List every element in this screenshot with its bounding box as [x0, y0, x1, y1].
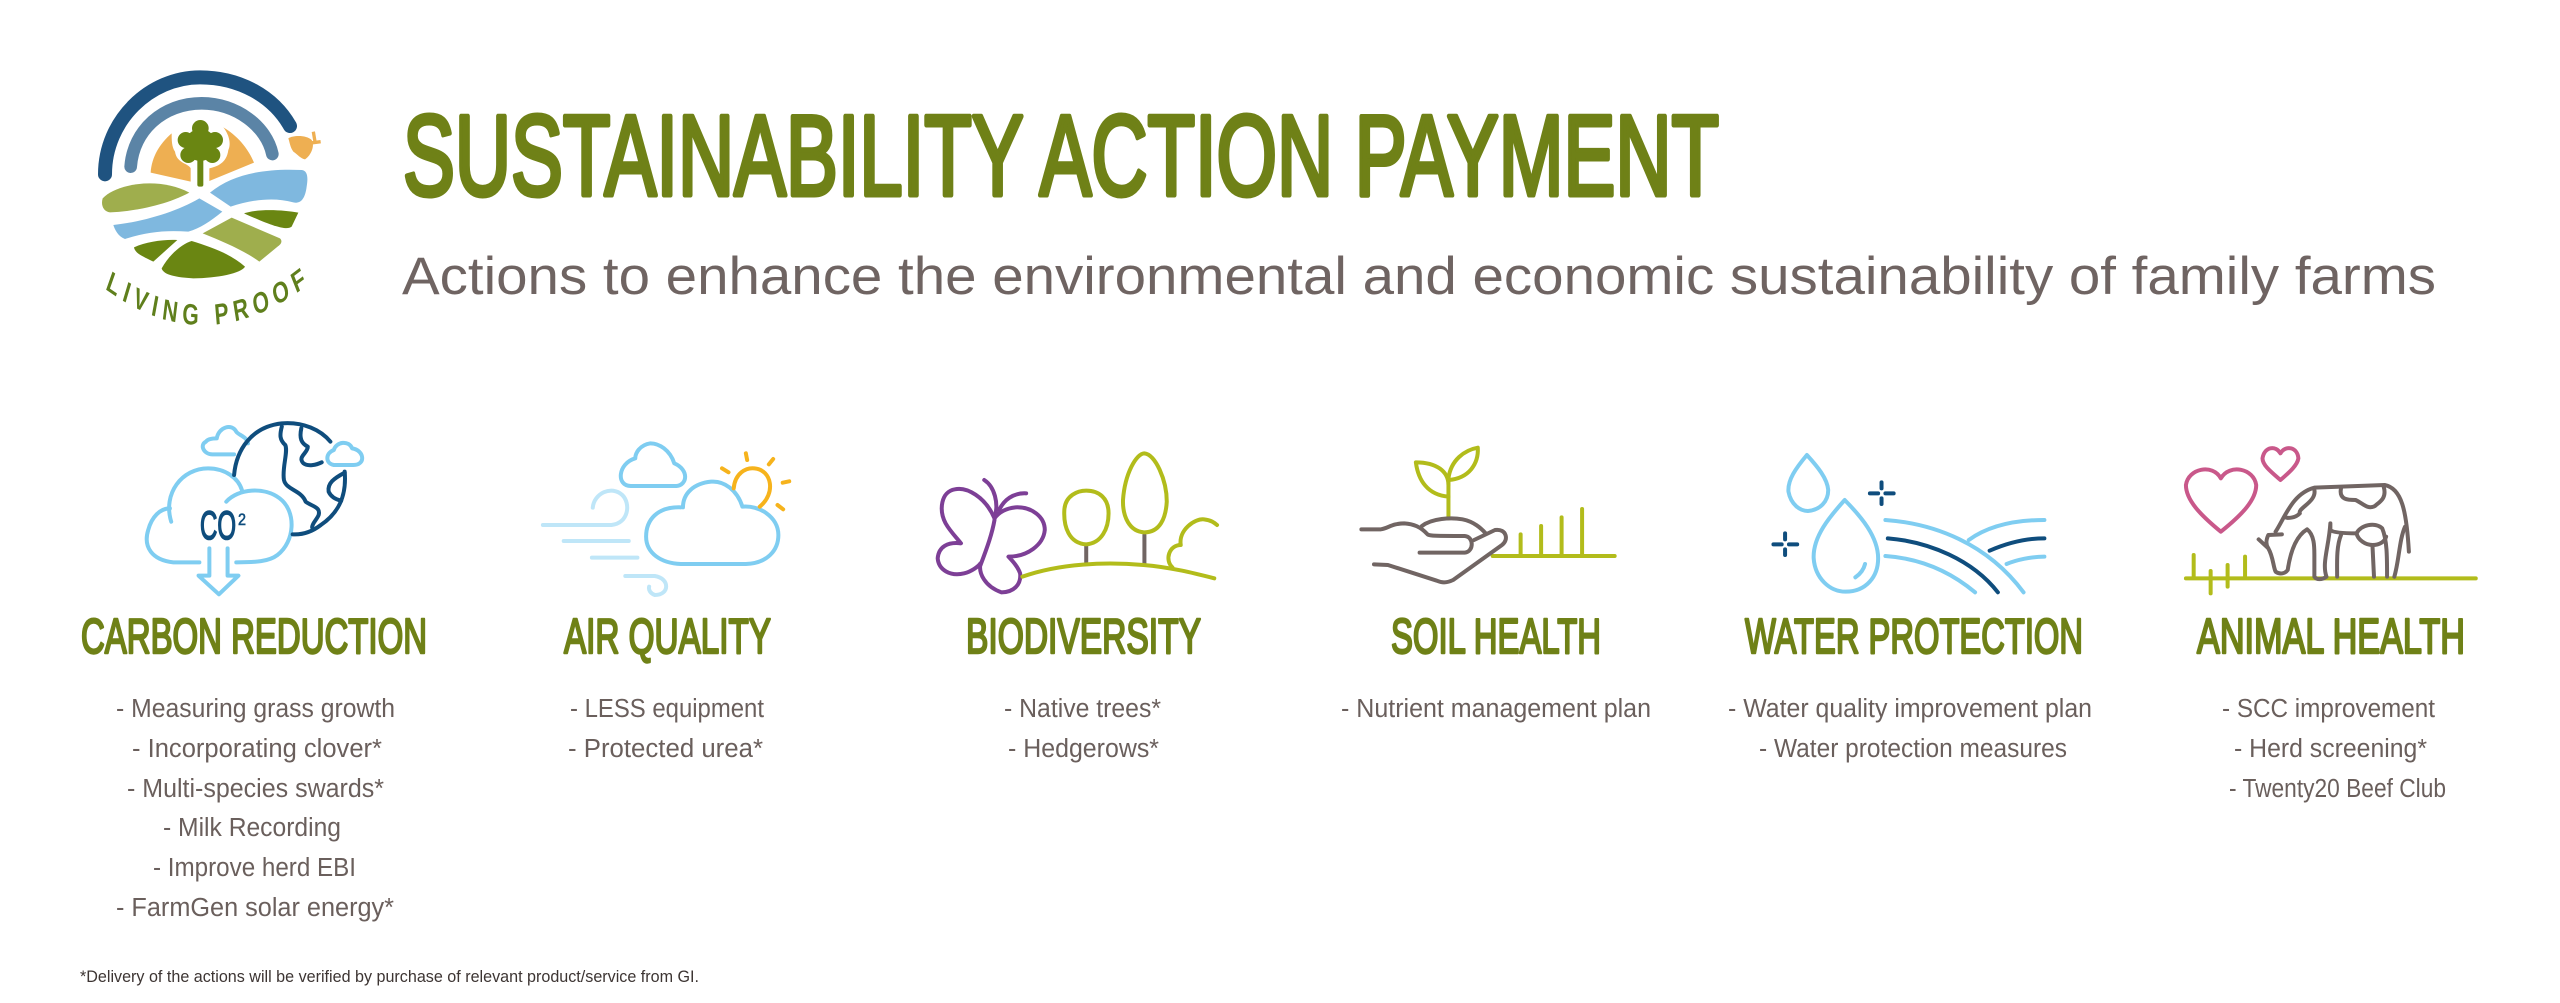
list: carbon actions: - Incorporating clover*	[132, 735, 382, 763]
heading: carbon reduction: CARBON REDUCTION	[81, 610, 427, 664]
panel: carbon reduction	[81, 423, 427, 922]
icon: CO2 cloud and globe	[147, 423, 362, 594]
list: air actions	[568, 695, 764, 763]
heading: air quality: AIR QUALITY	[564, 610, 771, 664]
logo fields	[102, 170, 307, 278]
icon: cow and hearts	[2186, 448, 2476, 593]
panel: air quality	[543, 443, 789, 763]
panel: water protection	[1728, 455, 2092, 763]
list: air actions: - Protected urea*	[568, 735, 763, 763]
panel: soil health	[1341, 448, 1651, 723]
icon: clouds, sun and wind	[543, 443, 789, 595]
panel: animal health	[2186, 448, 2476, 803]
list: water actions: - Water quality improvement plan	[1728, 695, 2092, 723]
logo bee	[288, 132, 321, 159]
icon: CO2 cloud and globe: CO	[200, 504, 236, 548]
list: animal actions: - SCC improvement	[2222, 695, 2435, 723]
icon: hand holding seedling	[1361, 448, 1615, 582]
list: carbon actions: - Milk Recording	[163, 814, 341, 842]
list: carbon actions: - Measuring grass growth	[116, 695, 395, 723]
footnote: *Delivery of the actions will be verified by purchase of relevant product/service from GI.	[80, 967, 699, 986]
logo: Living Proof	[98, 70, 321, 325]
title: SUSTAINABILITY ACTION PAYMENT	[403, 93, 1719, 220]
list: water actions	[1728, 695, 2092, 763]
heading: water protection: WATER PROTECTION	[1745, 610, 2083, 664]
list: water actions: - Water protection measures	[1759, 735, 2067, 763]
list: air actions: - LESS equipment	[570, 695, 764, 723]
list: animal actions	[2222, 695, 2446, 803]
logo wordmark: LIVING PROOF	[106, 268, 304, 325]
list: soil actions: - Nutrient management plan	[1341, 695, 1651, 723]
subtitle: Actions to enhance the environmental and economic sustainability of family farms	[402, 247, 2436, 306]
list: carbon actions: - Improve herd EBI	[153, 854, 356, 882]
heading: soil health: SOIL HEALTH	[1391, 610, 1601, 664]
logo tree	[178, 120, 223, 187]
icon: CO2 cloud and globe: 2	[238, 510, 246, 529]
panel: biodiversity	[938, 453, 1217, 763]
list: carbon actions: - FarmGen solar energy*	[116, 894, 394, 922]
list: biodiversity actions	[1004, 695, 1161, 763]
list: carbon actions	[116, 695, 395, 922]
list: biodiversity actions: - Native trees*	[1004, 695, 1161, 723]
icon: water drops and river	[1773, 455, 2044, 592]
list: carbon actions: - Multi-species swards*	[127, 775, 384, 803]
logo sun	[151, 127, 254, 182]
icon: butterfly and trees	[938, 453, 1217, 592]
list: animal actions: - Twenty20 Beef Club	[2229, 775, 2446, 803]
heading: biodiversity: BIODIVERSITY	[966, 610, 1201, 664]
list: animal actions: - Herd screening*	[2234, 735, 2427, 763]
logo rainbow arcs	[105, 77, 290, 174]
list: biodiversity actions: - Hedgerows*	[1008, 735, 1159, 763]
